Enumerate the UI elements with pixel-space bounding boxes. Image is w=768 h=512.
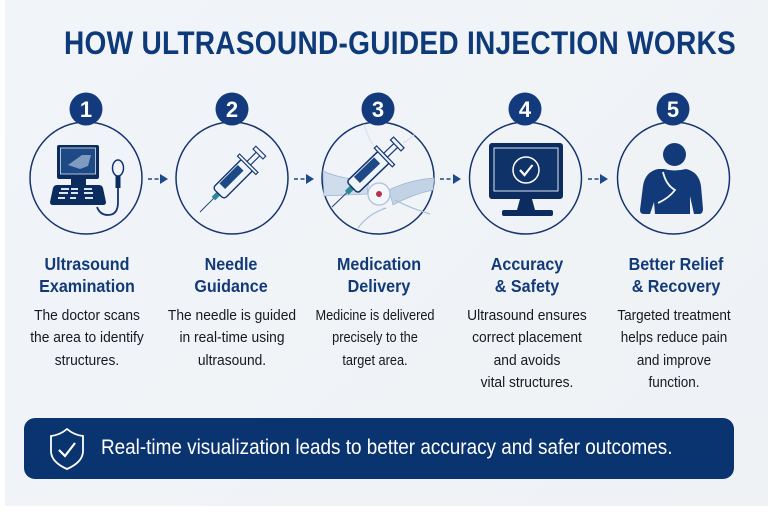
step 1 text <box>30 307 144 369</box>
badge 4 <box>508 92 542 126</box>
step 5 icon: patient <box>618 122 730 234</box>
step 1 icon: ultrasound machine <box>30 122 142 234</box>
step 3 text: target area. <box>342 352 408 369</box>
step 4 text: correct placement <box>472 329 582 346</box>
step 2 heading <box>194 254 268 296</box>
callout banner <box>24 418 734 479</box>
step 2 text: in real-time using <box>179 329 285 346</box>
step 2 text <box>168 307 296 369</box>
step 1 heading <box>39 254 135 296</box>
step 3 text: precisely to the <box>332 329 418 346</box>
step 2 heading: Guidance <box>194 276 268 296</box>
step 4 text: Ultrasound ensures <box>467 307 587 324</box>
step 4 text: vital structures. <box>481 374 573 391</box>
step 5 text: function. <box>648 374 700 391</box>
step 4 text <box>467 307 587 391</box>
step 4 heading <box>491 254 564 296</box>
badge 3: 3 <box>372 97 384 122</box>
step 1 text: The doctor scans <box>34 307 140 324</box>
badge 3 <box>362 92 394 126</box>
step 5 heading <box>629 254 724 296</box>
step 5 heading: & Recovery <box>632 276 720 296</box>
badge 1 <box>70 92 102 126</box>
step 5 text: Targeted treatment <box>617 307 731 324</box>
arrow 1 to 2 <box>148 174 168 184</box>
step 2 text: The needle is guided <box>168 307 296 324</box>
badge 4: 4 <box>519 97 532 122</box>
step 5 text <box>617 307 731 391</box>
step 5 heading: Better Relief <box>629 254 723 274</box>
step 1 text: the area to identify <box>30 329 144 346</box>
step 4 heading: & Safety <box>495 276 559 296</box>
step 3 heading: Delivery <box>348 276 410 296</box>
step 3 text <box>315 307 435 369</box>
step 3 heading: Medication <box>337 254 421 274</box>
arrow 4 to 5 <box>588 174 608 184</box>
step 4 icon: monitor with check <box>470 122 582 234</box>
step badges <box>70 92 690 126</box>
step 2 text: ultrasound. <box>198 352 266 369</box>
arrow 2 to 3 <box>294 174 314 184</box>
step 4 heading: Accuracy <box>491 254 563 274</box>
step 3 heading <box>337 254 421 296</box>
badge 5: 5 <box>667 97 679 122</box>
callout text: Real-time visualization leads to better accuracy and safer outcomes. <box>101 436 672 459</box>
step 5 text: and improve <box>637 352 711 369</box>
icon: shield check <box>50 428 84 470</box>
step 2 icon: syringe <box>176 122 288 234</box>
step 5 text: helps reduce pain <box>621 329 727 346</box>
step 3 icon: injection into tissue <box>322 122 434 234</box>
title: HOW ULTRASOUND-GUIDED INJECTION WORKS <box>64 25 736 61</box>
step 2 heading: Needle <box>205 254 257 274</box>
badge 1: 1 <box>80 97 92 122</box>
step 1 heading: Ultrasound <box>45 254 129 274</box>
step 3 text: Medicine is delivered <box>315 307 435 324</box>
badge 2 <box>216 92 248 126</box>
step 1 text: structures. <box>55 352 119 369</box>
badge 5 <box>656 92 690 126</box>
badge 2: 2 <box>226 97 238 122</box>
arrow 3 to 4 <box>440 174 461 184</box>
step 4 text: and avoids <box>494 352 560 369</box>
step 1 heading: Examination <box>39 276 135 296</box>
